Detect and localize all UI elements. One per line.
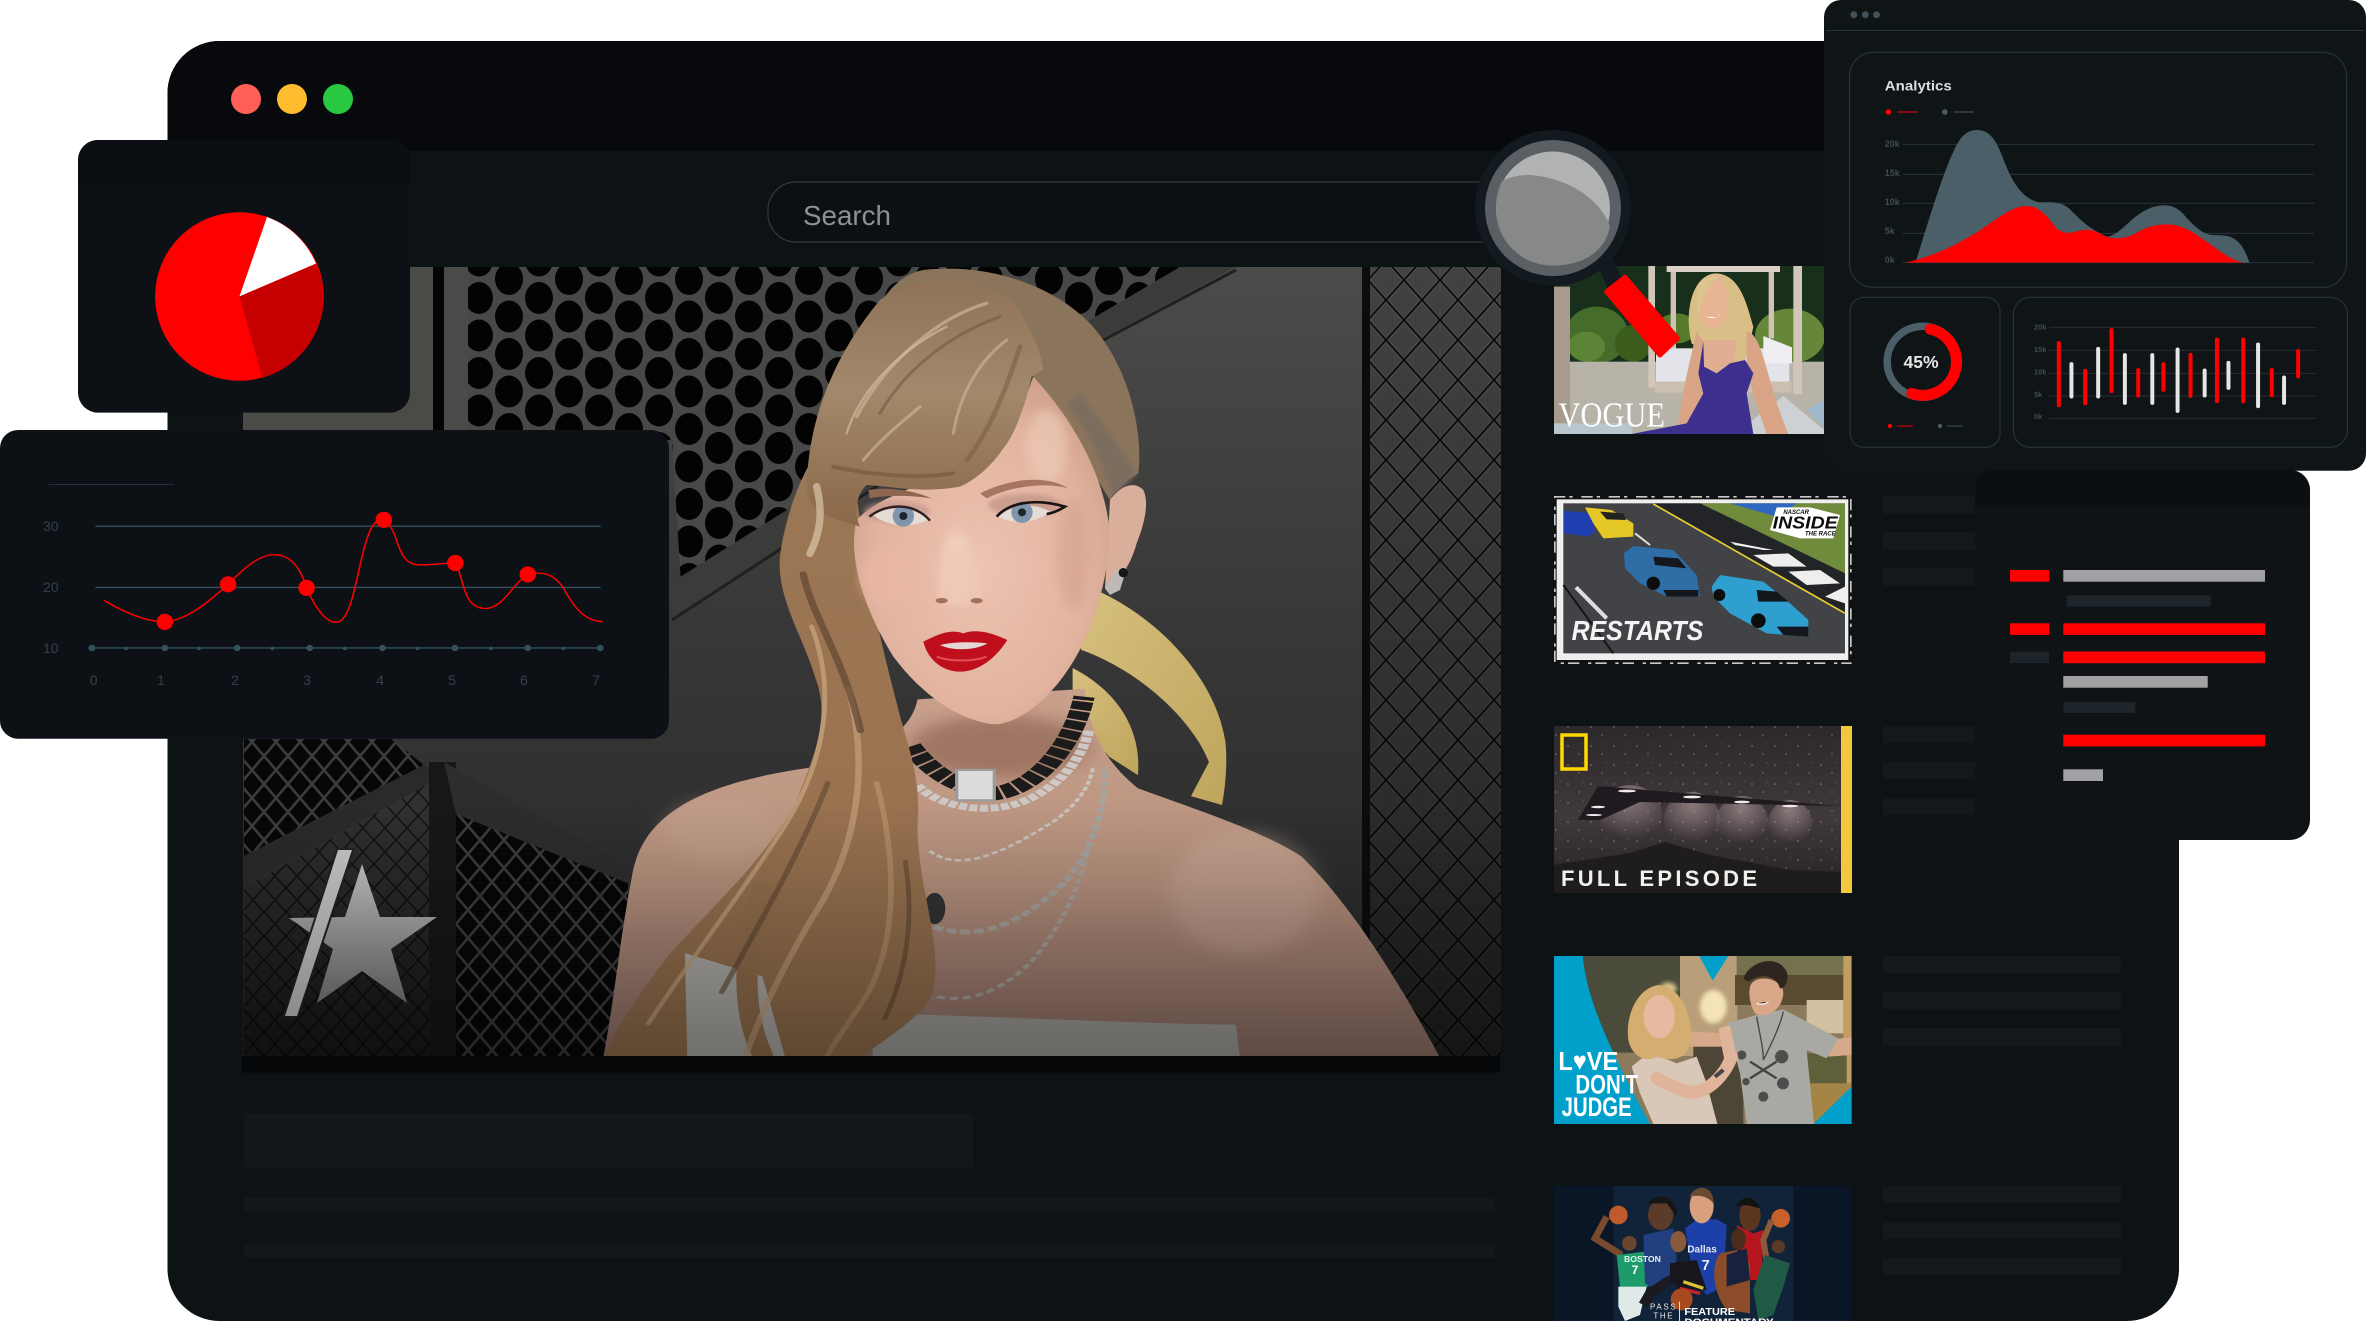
icon: magnifying glass: [1475, 130, 1677, 355]
line chart x axis labels: 0: [90, 672, 98, 688]
donut gauge card: [1850, 297, 2000, 447]
line chart x axis labels: 3: [303, 672, 311, 688]
thumbnail: Pass the Rock documentary: [1554, 1186, 1852, 1321]
thumbnail: Pass the Rock documentary: PASS: [1650, 1302, 1677, 1311]
hero image: portrait on red carpet backdrop: [243, 267, 1501, 1058]
yellow side stripe: [1841, 726, 1852, 893]
panel: line chart card: [0, 430, 669, 739]
area chart card: [1850, 52, 2346, 287]
panel: horizontal bars list card: [1975, 470, 2310, 840]
thumbnail: Vogue interview: [1554, 266, 1825, 435]
thumbnail: Pass the Rock documentary: Dallas: [1687, 1245, 1717, 1256]
vertical bar chart card: 15k: [2034, 345, 2047, 354]
window control: green dot: [323, 84, 353, 114]
area chart card: 15k: [1885, 168, 1901, 178]
search bar: [768, 182, 1580, 242]
thumbnail: Love Don't Judge: [1554, 956, 1852, 1124]
thumbnail: NASCAR Inside the Race: THE RACE: [1805, 532, 1837, 538]
gold gramophone trophy behind subject: [1073, 587, 1226, 805]
line chart plot: [88, 512, 604, 651]
thumbnail: Pass the Rock documentary: 7: [1702, 1258, 1710, 1274]
line chart x axis labels: 1: [157, 672, 165, 688]
darkening fade over hero bottom: [243, 830, 1501, 1056]
donut gauge card: 45%: [1903, 352, 1939, 372]
thumbnail: National Geographic full episode: FULL EPISODE: [1561, 866, 1757, 891]
analytics header dots: [1850, 11, 1880, 18]
thumbnail: Love Don't Judge: JUDGE: [1562, 1092, 1632, 1122]
window title bar: [168, 41, 1824, 151]
portrait: long wavy hair: [603, 417, 936, 1058]
line chart x axis labels: 2: [231, 672, 239, 688]
logo: slashed star: [285, 850, 437, 1016]
line chart y axis labels: 20: [43, 579, 59, 595]
thumbnail: NASCAR Inside the Race: RESTARTS: [1572, 615, 1704, 646]
portrait: head, face and fringe: [807, 269, 1146, 724]
portrait: body and dress: [603, 689, 1440, 1058]
vertical bar chart card: [2013, 297, 2347, 447]
vertical bar chart card: 0k: [2034, 412, 2043, 421]
portrait: necklaces: [911, 697, 1105, 998]
vertical bar chart card: 20k: [2034, 322, 2047, 332]
line chart y axis labels: 30: [43, 518, 59, 534]
pie chart: [155, 212, 324, 381]
line chart title placeholder: [49, 484, 174, 485]
thumbnail: Love Don't Judge: L♥VE: [1558, 1046, 1618, 1076]
thumbnail: Pass the Rock documentary: BOSTON: [1624, 1254, 1661, 1264]
window control: yellow dot: [277, 84, 307, 114]
panel: analytics dashboard: [1824, 0, 2366, 471]
vertical bar chart card: 5k: [2034, 390, 2043, 399]
line chart x axis labels: 7: [592, 672, 600, 688]
skeleton: title placeholder: [244, 1114, 973, 1168]
thumbnail: National Geographic full episode: [1554, 726, 1852, 893]
search bar: Search: [803, 200, 891, 231]
skeleton: sidebar text placeholders: [1883, 496, 2121, 1275]
line chart x axis labels: [90, 672, 600, 688]
window control: red dot: [231, 84, 261, 114]
thumbnail: Pass the Rock documentary: 7: [1632, 1263, 1639, 1277]
thumbnail: NASCAR Inside the Race: INSIDE: [1773, 512, 1839, 532]
hero caption strip: [242, 1056, 1500, 1072]
thumbnail: NASCAR Inside the Race: NASCAR: [1783, 510, 1810, 516]
line chart y axis labels: [43, 518, 59, 656]
skeleton: description lines: [244, 1197, 1495, 1258]
area chart card: 10k: [1885, 197, 1901, 207]
thumbnail: NASCAR Inside the Race: [1554, 496, 1852, 664]
line chart x axis labels: 6: [520, 672, 528, 688]
panel: pie chart card: [78, 140, 410, 413]
area chart card: Analytics: [1885, 78, 1952, 94]
line chart y axis labels: 10: [43, 640, 59, 656]
thumbnail: Love Don't Judge: DON'T: [1575, 1069, 1638, 1099]
National Geographic yellow frame: [1562, 735, 1586, 769]
area chart card: 5k: [1885, 226, 1896, 236]
vertical bar chart card: 10k: [2034, 368, 2047, 376]
area chart card: 0k: [1885, 255, 1896, 265]
line chart x axis labels: 4: [376, 672, 384, 688]
thumbnail: Pass the Rock documentary: FEATURE: [1684, 1307, 1735, 1318]
thumbnail: Pass the Rock documentary: THE: [1653, 1312, 1674, 1321]
area chart card: 20k: [1885, 139, 1901, 149]
thumbnail: Vogue interview: VOGUE: [1558, 396, 1665, 435]
line chart x axis labels: 5: [448, 672, 456, 688]
